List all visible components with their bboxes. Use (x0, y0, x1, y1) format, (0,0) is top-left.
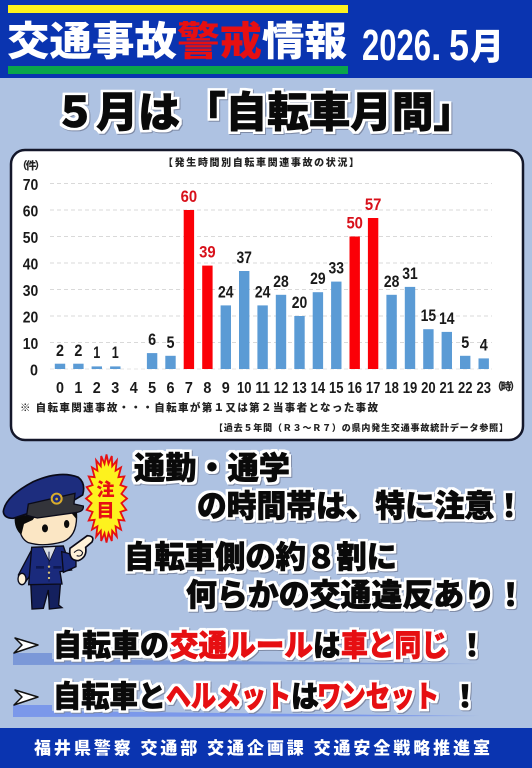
x axis labels (56, 380, 491, 397)
value labels: 20 (292, 294, 307, 312)
x axis labels: 18 (384, 380, 399, 397)
x axis labels: 23 (476, 380, 491, 397)
hair (15, 513, 38, 535)
date: 2026.5月: . (431, 27, 442, 69)
text block: 80% of cyclists violation: 何らかの交通違反あり！ (186, 570, 526, 615)
value labels: 15 (421, 307, 436, 325)
text block: commuting hours warning: 通勤・通学 (134, 443, 290, 488)
y axis labels: 70 (23, 177, 38, 194)
x axis unit: （時） (492, 379, 520, 394)
title: 交通事故警戒情報: 警戒 (177, 9, 262, 67)
value labels: 39 (199, 242, 216, 262)
value labels: 14 (439, 310, 455, 328)
right arm with pointing hand (62, 552, 76, 572)
x axis labels: 15 (329, 380, 344, 397)
y axis unit: （件） (17, 158, 45, 173)
heading: 5月は「自転車月間」: 「自転車月間」 (184, 79, 475, 140)
highlight band (13, 705, 480, 717)
heading: 5月は「自転車月間」 (54, 79, 475, 140)
value labels: 57 (365, 195, 381, 214)
point 1: same rules as cars: 自転車の (53, 621, 169, 665)
title: 交通事故警戒情報: 情報 (262, 9, 347, 67)
grid lines (50, 184, 492, 369)
x axis labels: 14 (311, 380, 325, 397)
left arm (18, 552, 37, 583)
point 1: same rules as cars: は (313, 621, 341, 665)
x axis labels: 19 (403, 380, 417, 397)
title: 交通事故警戒情報 (7, 9, 347, 67)
text block: commuting hours warning (134, 443, 524, 526)
y axis labels (23, 177, 38, 380)
x axis labels: 1 (74, 380, 82, 397)
point 1: same rules as cars: ！ (457, 621, 487, 665)
x axis labels: 21 (440, 380, 454, 397)
x axis labels: 6 (166, 380, 175, 397)
y axis labels: 0 (30, 362, 38, 380)
value labels: 50 (346, 214, 363, 232)
cap crown (3, 474, 84, 518)
value labels: 28 (384, 273, 399, 291)
y axis labels: 30 (23, 283, 38, 300)
icon: arrow head (14, 638, 38, 653)
title: 交通事故警戒情報: 交通事故 (7, 9, 177, 67)
x axis labels: 0 (56, 380, 64, 397)
data source note: 【過去５年間（Ｒ３～Ｒ７）の県内発生交通事故統計データ参照】 (214, 421, 508, 434)
x axis labels: 12 (274, 380, 288, 397)
text block: 80% of cyclists violation: 自転車側の約８割に (124, 532, 397, 577)
value labels: 2 (74, 342, 82, 360)
y axis labels: 60 (23, 204, 38, 220)
icon: arrow head (14, 690, 38, 705)
y axis labels: 40 (23, 256, 38, 274)
date: 2026.5月 (362, 18, 504, 70)
x axis labels: 17 (366, 380, 380, 397)
point 1: same rules as cars: 交通ルール (170, 621, 313, 665)
cap badge (52, 494, 62, 504)
callout: 注目 burst: 注 (96, 476, 114, 502)
x axis labels: 7 (185, 380, 193, 397)
date: 2026.5月: 2026 (362, 21, 431, 70)
value labels: 33 (329, 260, 344, 278)
value labels: 29 (310, 270, 326, 288)
point 2: bicycle and helmet are a set: 自転車と (53, 672, 166, 716)
value labels: 2 (56, 342, 64, 360)
icon: police officer (3, 474, 93, 609)
x axis labels: 11 (255, 380, 270, 397)
y axis labels: 50 (23, 230, 38, 247)
point 2: bicycle and helmet are a set: は (291, 672, 319, 716)
header band (0, 0, 532, 78)
value labels: 24 (255, 284, 271, 302)
value labels: 31 (402, 265, 418, 283)
point 2: bicycle and helmet are a set (13, 672, 480, 717)
date: 2026.5月: 月 (470, 18, 504, 70)
point 1: same rules as cars: 車と同じ (341, 621, 448, 665)
heading: 5月は「自転車月間」: ５月は (54, 79, 180, 140)
x axis labels: 10 (237, 380, 252, 397)
y axis labels: 20 (23, 310, 38, 326)
highlight band (13, 653, 480, 665)
point 1: same rules as cars (13, 621, 487, 665)
chart title: 【発生時間別自転車関連事故の状況】 (163, 154, 359, 169)
x axis labels: 3 (111, 380, 119, 397)
value labels: 1 (93, 344, 100, 362)
value labels: 28 (273, 273, 289, 291)
point 2: bicycle and helmet are a set: ！ (450, 672, 480, 716)
x axis labels: 4 (130, 380, 138, 397)
x axis labels: 5 (148, 380, 156, 397)
x axis labels: 2 (93, 380, 101, 397)
value labels: 4 (480, 336, 488, 354)
value labels: 1 (112, 344, 119, 362)
x axis labels: 8 (203, 380, 211, 397)
value labels: 5 (461, 334, 469, 352)
x axis labels: 16 (347, 380, 362, 397)
y axis labels: 10 (23, 336, 38, 353)
head (20, 508, 77, 545)
legs (31, 582, 62, 609)
footer text: issuing department: 福井県警察 交通部 交通企画課 交通安全戦略推進室 (34, 734, 490, 759)
torso (29, 546, 72, 585)
value labels: 60 (181, 187, 197, 206)
eyes (42, 524, 48, 532)
x axis labels: 13 (292, 380, 307, 397)
x axis labels: 9 (222, 380, 230, 397)
point 2: bicycle and helmet are a set: ワンセット (317, 672, 439, 716)
text block: 80% of cyclists violation (124, 532, 526, 615)
definition note: ※ 自転車関連事故・・・自転車が第１又は第２当事者となった事故 (20, 400, 378, 415)
cap band and visor (27, 493, 83, 518)
panel: bicycle accidents by hour chart (11, 150, 523, 440)
value labels (56, 187, 488, 362)
bars (55, 210, 489, 369)
callout: 注目 burst: 目 (96, 497, 114, 523)
date: 2026.5月: 5 (449, 21, 469, 70)
x axis labels: 20 (421, 380, 436, 397)
value labels: 24 (218, 284, 234, 302)
callout: 注目 burst (86, 454, 127, 542)
text block: commuting hours warning: の時間帯は、特に注意！ (197, 481, 524, 526)
value labels: 5 (166, 334, 174, 352)
value labels: 37 (236, 249, 252, 267)
x axis labels: 22 (458, 380, 473, 397)
point 2: bicycle and helmet are a set: ヘルメット (166, 672, 291, 716)
footer band (0, 728, 532, 768)
value labels: 6 (148, 331, 156, 349)
